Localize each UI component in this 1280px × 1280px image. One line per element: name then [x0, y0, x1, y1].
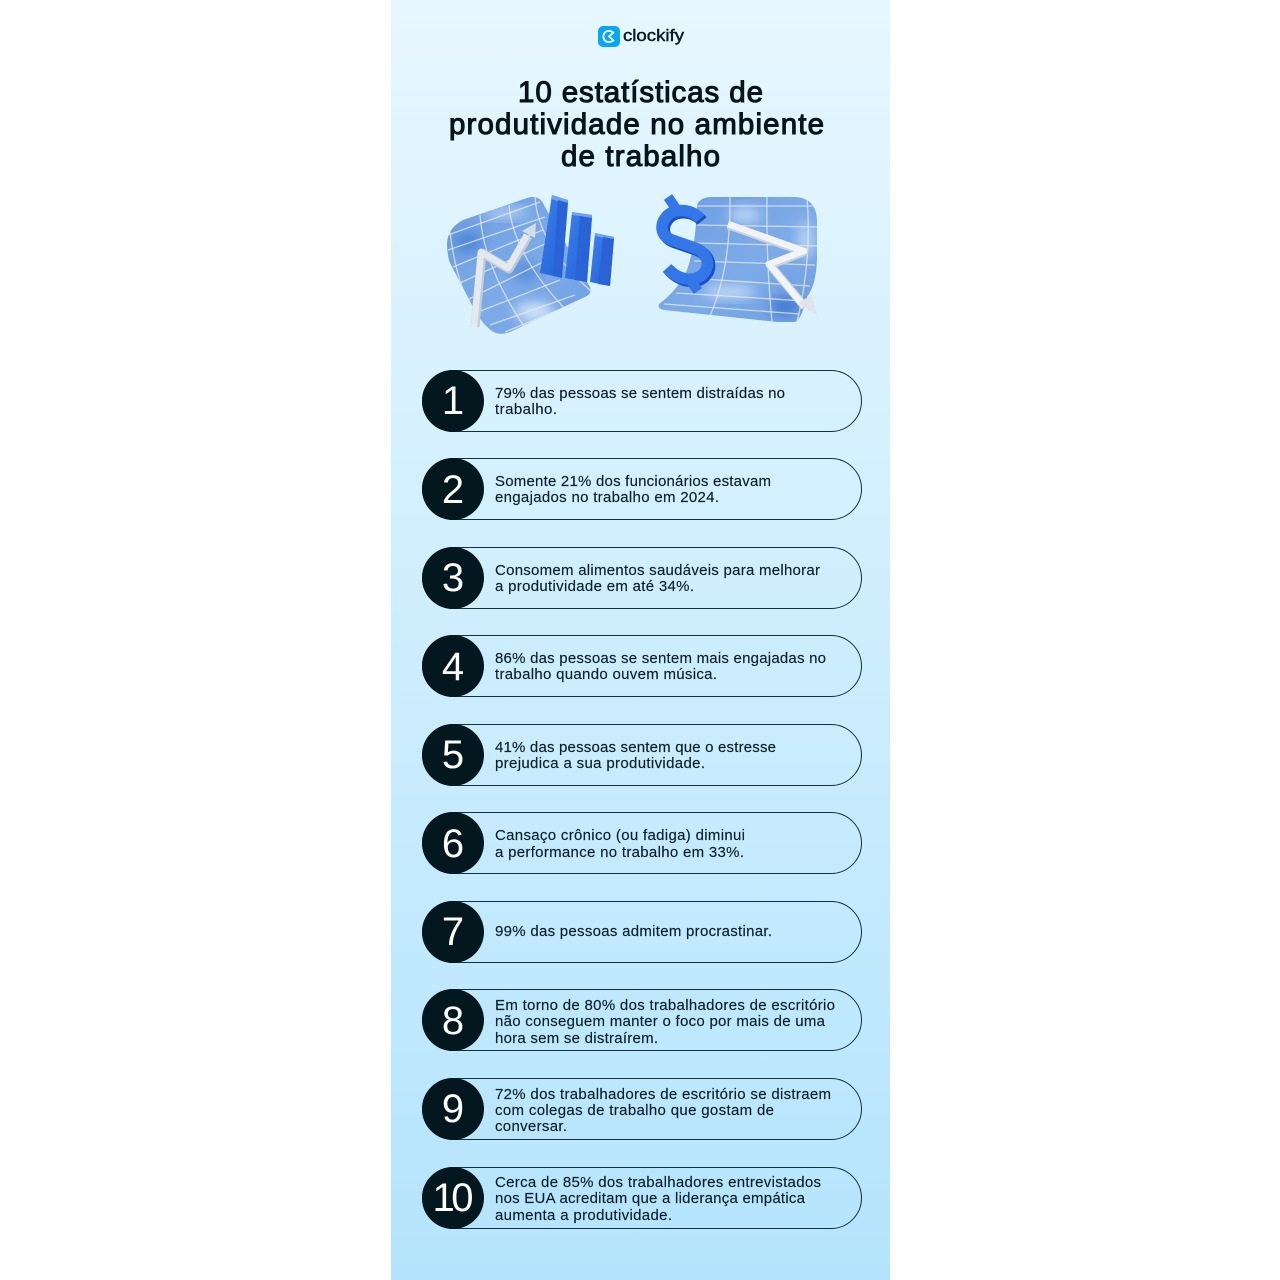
bars	[540, 195, 614, 286]
item 1: 79% das pessoas se sentem distraídas no	[495, 385, 785, 402]
title: 10 estatísticas de	[518, 76, 763, 109]
illustration: rising chart	[447, 195, 614, 335]
arrow down	[728, 224, 805, 307]
item 9: com colegas de trabalho que gostam de	[495, 1102, 774, 1119]
item 2	[422, 458, 862, 520]
item 10: aumenta a produtividade.	[495, 1207, 672, 1224]
title: de trabalho	[561, 140, 720, 173]
arrowhead	[798, 295, 817, 315]
item 9	[422, 1078, 862, 1140]
item 1: 1	[442, 379, 464, 423]
curved grid panel	[447, 197, 592, 335]
item 1: trabalho.	[495, 401, 557, 418]
curved grid panel	[659, 197, 817, 322]
arrow up	[474, 235, 528, 327]
item 5	[422, 724, 862, 786]
item 10	[422, 1167, 862, 1229]
item 5: 5	[442, 733, 464, 777]
item 9: 9	[442, 1087, 464, 1131]
item 8	[422, 989, 862, 1051]
item 4	[422, 635, 862, 697]
item 8: hora sem se distraírem.	[495, 1030, 658, 1047]
item 5: 41% das pessoas sentem que o estresse	[495, 739, 776, 756]
logo: clockify	[598, 26, 685, 47]
item 6: 6	[442, 822, 464, 866]
item 3: Consomem alimentos saudáveis para melhorar	[495, 562, 820, 579]
item 7: 99% das pessoas admitem procrastinar.	[495, 923, 772, 940]
item 3	[422, 547, 862, 609]
title: produtividade no ambiente	[449, 108, 824, 141]
arrowhead	[522, 223, 536, 238]
item 4: 4	[442, 645, 464, 689]
item 10: Cerca de 85% dos trabalhadores entrevistados	[495, 1174, 821, 1191]
illustration: falling money	[659, 197, 817, 322]
item 9: conversar.	[495, 1118, 567, 1135]
item 7	[422, 901, 862, 963]
item 6: Cansaço crônico (ou fadiga) diminui	[495, 827, 745, 844]
item 6	[422, 812, 862, 874]
title	[449, 76, 824, 173]
logo wordmark: clockify	[623, 26, 685, 45]
item 1	[422, 370, 862, 432]
item 9: 72% dos trabalhadores de escritório se distraem	[495, 1086, 831, 1103]
item 10: nos EUA acreditam que a liderança empática	[495, 1190, 806, 1207]
list: statistics	[422, 370, 862, 1229]
icon: clockify mark	[598, 26, 620, 47]
panel: background	[391, 0, 890, 1280]
item 4: 86% das pessoas se sentem mais engajadas no	[495, 650, 826, 667]
item 3: a produtividade em até 34%.	[495, 578, 694, 595]
item 8: Em torno de 80% dos trabalhadores de escritório	[495, 997, 835, 1014]
item 10: 10	[432, 1176, 474, 1220]
item 6: a performance no trabalho em 33%.	[495, 844, 744, 861]
item 3: 3	[442, 556, 464, 600]
icon: dollar sign	[662, 197, 709, 291]
item 2: Somente 21% dos funcionários estavam	[495, 473, 771, 490]
item 8: não conseguem manter o foco por mais de uma	[495, 1013, 826, 1030]
item 4: trabalho quando ouvem música.	[495, 666, 717, 683]
item 2: 2	[442, 468, 464, 512]
item 5: prejudica a sua produtividade.	[495, 755, 705, 772]
item 8: 8	[442, 999, 464, 1043]
item 7: 7	[442, 910, 464, 954]
item 2: engajados no trabalho em 2024.	[495, 489, 719, 506]
